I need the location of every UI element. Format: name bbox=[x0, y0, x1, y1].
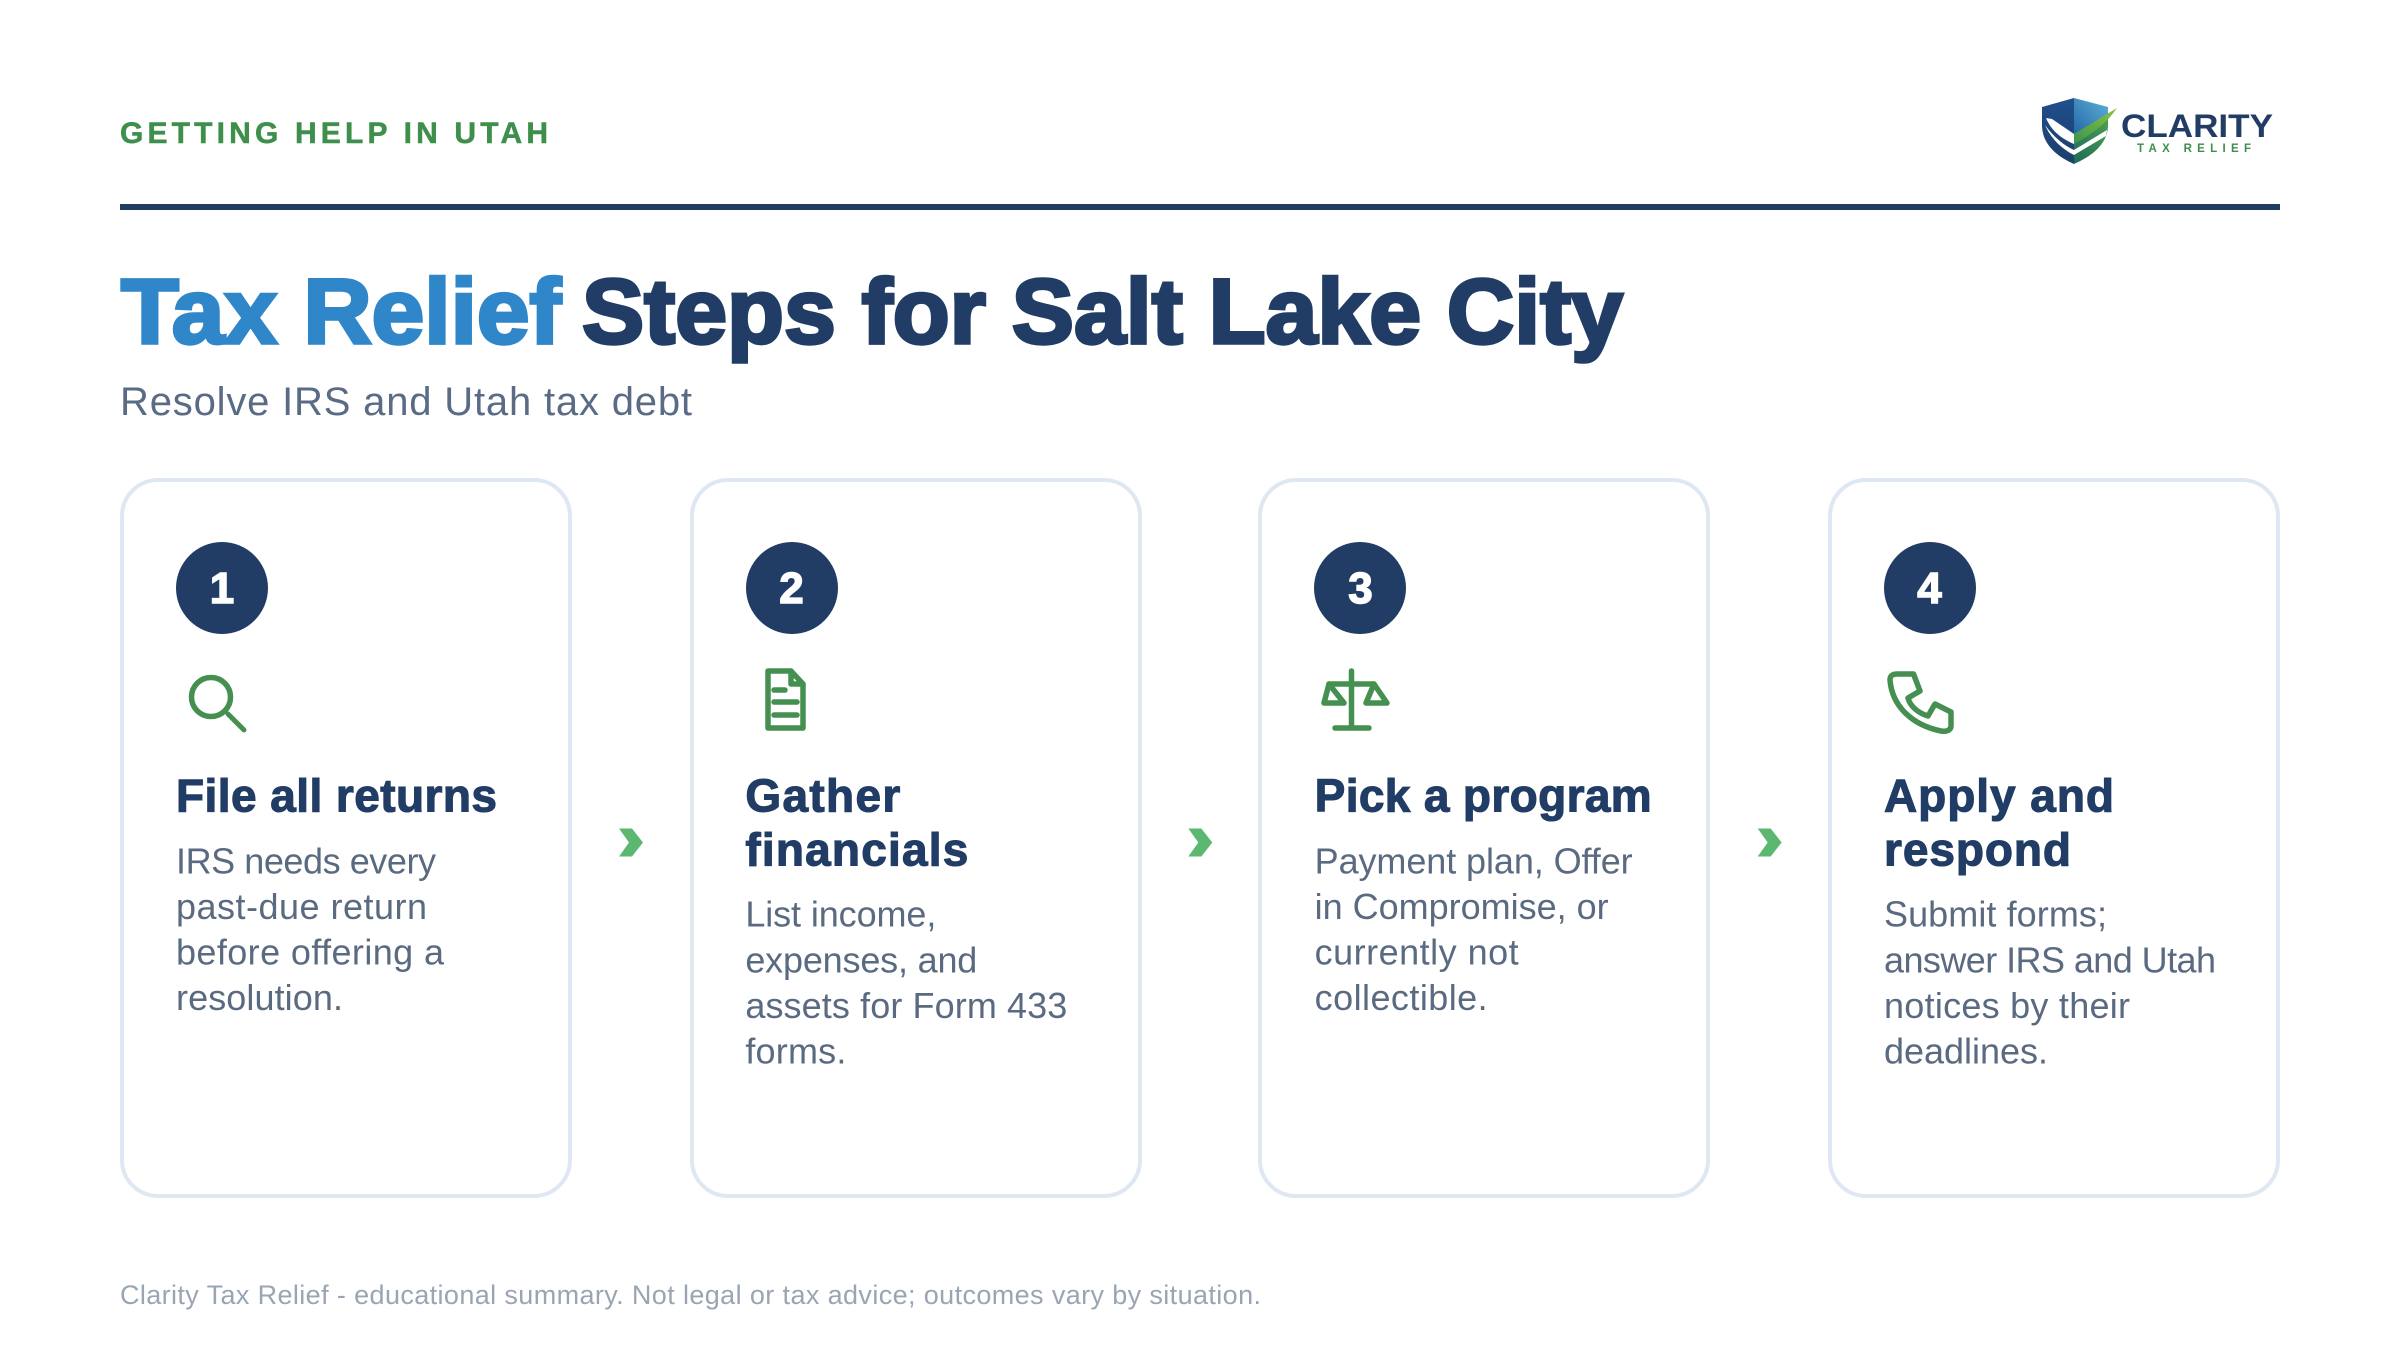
step 1 description: IRS needs every bbox=[176, 841, 436, 882]
step 3 description: currently not bbox=[1315, 932, 1519, 973]
step number 2: 2 bbox=[779, 564, 804, 613]
icon: document bbox=[768, 671, 803, 728]
step 2 heading bbox=[745, 770, 968, 876]
step 3 description: Payment plan, Offer bbox=[1315, 841, 1633, 882]
eyebrow heading: GETTING HELP IN UTAH bbox=[120, 117, 548, 150]
step number 3 bbox=[1314, 542, 1406, 634]
step number 1: 1 bbox=[210, 564, 234, 613]
panel: step 1 file all returns bbox=[122, 480, 570, 1196]
step 4 heading bbox=[1884, 770, 2114, 876]
arrow 3 bbox=[1758, 828, 1782, 856]
step 1 description: resolution. bbox=[176, 977, 343, 1018]
step 1 description: before offering a bbox=[176, 932, 445, 973]
logo: Clarity Tax Relief bbox=[2042, 98, 2273, 164]
step 3 description bbox=[1315, 841, 1633, 1018]
step number 4: 4 bbox=[1917, 564, 1942, 613]
step 1 heading: File all returns bbox=[176, 770, 497, 822]
step 4 description: answer IRS and Utah bbox=[1884, 940, 2216, 980]
step number 3: 3 bbox=[1348, 564, 1373, 613]
icon: balance scale bbox=[1324, 671, 1387, 728]
step number 4 bbox=[1884, 542, 1976, 634]
step 2 heading: financials bbox=[745, 824, 968, 876]
step 4 heading: Apply and bbox=[1884, 770, 2114, 822]
title: Steps for Salt Lake City bbox=[582, 261, 1623, 363]
step 3 description: in Compromise, or bbox=[1315, 886, 1609, 927]
step 2 description: List income, bbox=[745, 894, 936, 934]
step number 1 bbox=[176, 542, 268, 634]
step 3 description: collectible. bbox=[1315, 977, 1488, 1018]
arrow 1 bbox=[619, 828, 643, 856]
step 4 description bbox=[1884, 894, 2216, 1072]
step 2 description: forms. bbox=[745, 1030, 846, 1072]
logo wordmark: CLARITY bbox=[2121, 108, 2273, 144]
step 2 description: assets for Form 433 bbox=[745, 985, 1067, 1026]
panel: step 2 gather financials bbox=[692, 480, 1140, 1196]
step 1 description: past-due return bbox=[176, 886, 427, 927]
step 4 description: Submit forms; bbox=[1884, 894, 2107, 934]
step 1 description bbox=[176, 841, 445, 1018]
step 2 description: expenses, and bbox=[745, 940, 977, 980]
arrow 2 bbox=[1188, 828, 1212, 856]
subtitle: Resolve IRS and Utah tax debt bbox=[120, 380, 692, 424]
icon: magnifying glass bbox=[192, 678, 244, 730]
title bbox=[121, 261, 1623, 363]
step number 2 bbox=[746, 542, 838, 634]
step 4 description: notices by their bbox=[1884, 985, 2130, 1026]
title: Tax Relief bbox=[121, 261, 561, 363]
panel: step 3 pick a program bbox=[1260, 480, 1708, 1196]
header rule bbox=[120, 204, 2280, 210]
logo tagline: TAX RELIEF bbox=[2137, 143, 2251, 155]
step 4 heading: respond bbox=[1884, 824, 2071, 876]
step 2 description bbox=[745, 894, 1067, 1072]
panel: step 4 apply and respond bbox=[1830, 480, 2278, 1196]
logo shield icon bbox=[2042, 98, 2117, 164]
step 4 description: deadlines. bbox=[1884, 1030, 2048, 1072]
step 2 heading: Gather bbox=[745, 770, 900, 822]
icon: phone bbox=[1890, 674, 1951, 731]
footer disclaimer: Clarity Tax Relief - educational summary. Not legal or tax advice; outcomes vary by situation. bbox=[120, 1280, 1261, 1310]
step 3 heading: Pick a program bbox=[1315, 770, 1652, 822]
